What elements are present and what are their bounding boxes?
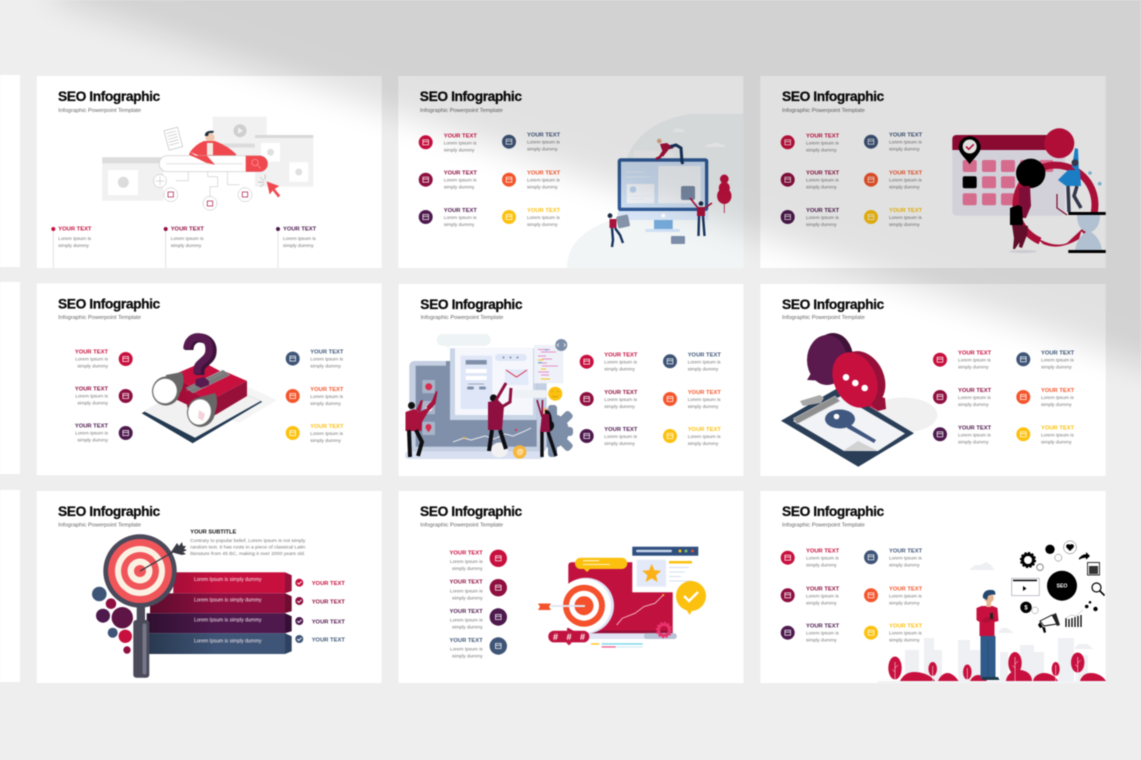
item 4: simply dummy: [310, 364, 342, 370]
item 3: YOUR TEXT: [450, 609, 483, 615]
illustration: SEO icon cloud: $: [1024, 606, 1028, 612]
item 2: YOUR TEXT: [806, 586, 840, 592]
diagonal window shadow overlay: [55, 0, 1141, 417]
item 5: simply dummy: [889, 185, 920, 191]
item 2: Lorem Ipsum is: [958, 395, 991, 401]
item 4: [286, 350, 344, 370]
partial slide: left edge row 2: [0, 282, 20, 474]
item 1: YOUR TEXT: [806, 549, 840, 555]
item 2: Lorem Ipsum is: [444, 178, 477, 184]
item 2: simply dummy: [77, 401, 109, 407]
item 2: Lorem Ipsum is: [806, 593, 839, 599]
item 5: simply dummy: [688, 404, 719, 410]
item 4: YOUR TEXT: [527, 133, 561, 139]
illustration: laptop, target, browser and check: # # #: [553, 632, 585, 642]
item 2: [580, 390, 638, 410]
illustration: binoculars and question mark: [142, 337, 277, 443]
item 5: Lorem Ipsum is: [889, 178, 922, 184]
item 3: simply dummy: [444, 222, 475, 228]
panel: slide 1 search bar: [37, 76, 382, 268]
item 3: [580, 427, 638, 447]
item 5: simply dummy: [889, 600, 920, 606]
item 2: [781, 171, 840, 191]
item 4: simply dummy: [889, 562, 920, 568]
item 4: Lorem Ipsum is: [527, 140, 560, 146]
item 3: YOUR TEXT: [444, 208, 477, 214]
item 1: YOUR TEXT: [450, 550, 483, 556]
item 3: YOUR TEXT: [958, 425, 992, 431]
item 2: YOUR TEXT: [444, 171, 477, 177]
item 1: simply dummy: [77, 364, 109, 370]
item 6: Lorem Ipsum is: [527, 215, 560, 221]
item 6: [502, 208, 561, 228]
item 1: simply dummy: [958, 365, 989, 371]
item 1: simply dummy: [806, 147, 837, 153]
item 4: YOUR TEXT: [310, 350, 344, 356]
ribbon bars: Lorem Ipsum is simply dummy: [194, 639, 262, 645]
item 2: Lorem Ipsum is: [806, 178, 839, 184]
item 4: Lorem Ipsum is: [1041, 357, 1074, 363]
item 1: YOUR TEXT: [75, 350, 108, 356]
item 3: simply dummy: [958, 439, 989, 445]
item 5: YOUR TEXT: [310, 387, 344, 393]
item 4: Lorem Ipsum is: [450, 647, 483, 653]
item 4: [502, 133, 561, 153]
item 1: [450, 550, 507, 572]
heading: SEO Infographic: [420, 504, 523, 519]
item 5: YOUR TEXT: [889, 586, 923, 592]
item 5: Lorem Ipsum is: [527, 178, 560, 184]
item 4: [663, 352, 721, 372]
subtitle block: Contrary to popular belief, Lorem Ipsum is not simply: [190, 538, 306, 544]
item 6: simply dummy: [1041, 439, 1072, 445]
item 1: YOUR TEXT: [604, 353, 638, 359]
subheading: Infographic Powerpoint Template: [782, 108, 865, 114]
item 6: Lorem Ipsum is: [688, 434, 721, 440]
item 6: Lorem Ipsum is: [889, 215, 922, 221]
item 4: Lorem Ipsum is: [889, 555, 922, 561]
item 6: YOUR TEXT: [310, 424, 344, 430]
item 3: Lorem Ipsum is: [444, 215, 477, 221]
item 2: simply dummy: [806, 185, 837, 191]
item: your text 3: simply dummy: [283, 243, 314, 249]
check list: YOUR TEXT: [312, 581, 345, 587]
item 4: YOUR TEXT: [889, 548, 923, 554]
illustration: laptop, gear and team: [405, 334, 574, 459]
item 6: [864, 624, 923, 644]
item 4: [864, 548, 923, 568]
item 6: YOUR TEXT: [1041, 425, 1075, 431]
item: your text 2: simply dummy: [171, 243, 202, 249]
partial slide: left edge row 1: [0, 75, 20, 267]
item 6: Lorem Ipsum is: [1041, 432, 1074, 438]
item: your text 1: Lorem Ipsum is: [58, 236, 92, 242]
item 5: simply dummy: [310, 401, 342, 407]
item 1: Lorem Ipsum is: [958, 358, 991, 364]
illustration: person with phone: [976, 590, 1000, 680]
item 2: YOUR TEXT: [604, 390, 638, 396]
item 4: simply dummy: [527, 147, 558, 153]
item 2: Lorem Ipsum is: [75, 394, 109, 400]
item 6: simply dummy: [527, 222, 558, 228]
item 1: Lorem Ipsum is: [806, 556, 839, 562]
panel: slide 2 monitor: [398, 76, 743, 268]
item 1: YOUR TEXT: [958, 351, 992, 357]
illustration: clipboard, key and speech bubbles: [781, 333, 937, 467]
item 6: simply dummy: [889, 222, 920, 228]
subheading: Infographic Powerpoint Template: [420, 522, 503, 528]
item 4: [864, 133, 923, 153]
item 6: [663, 427, 721, 447]
item 2: simply dummy: [444, 185, 475, 191]
item 6: Lorem Ipsum is: [310, 431, 344, 437]
item 3: simply dummy: [604, 441, 636, 447]
item 1: YOUR TEXT: [806, 133, 840, 139]
item: your text 2: [164, 226, 204, 268]
item 3: YOUR TEXT: [75, 424, 108, 430]
item 4: Lorem Ipsum is: [889, 140, 922, 146]
item 5: Lorem Ipsum is: [310, 394, 344, 400]
item: your text 1: YOUR TEXT: [58, 226, 92, 232]
item: your text 2: Lorem Ipsum is: [171, 236, 204, 242]
check list: YOUR TEXT: [312, 637, 345, 643]
item 6: [864, 208, 923, 228]
item 1: Lorem Ipsum is: [444, 140, 477, 146]
item 3: Lorem Ipsum is: [958, 432, 991, 438]
illustration: SEO icon cloud: [1012, 541, 1104, 633]
item 2: [419, 171, 477, 191]
subheading: Infographic Powerpoint Template: [782, 522, 865, 528]
heading: SEO Infographic: [420, 297, 523, 312]
subheading: Infographic Powerpoint Template: [58, 108, 141, 114]
item: your text 1: [51, 226, 92, 268]
item 1: Lorem Ipsum is: [604, 360, 638, 366]
item 4: YOUR TEXT: [450, 638, 483, 644]
item 5: YOUR TEXT: [1041, 388, 1075, 394]
subheading: Infographic Powerpoint Template: [58, 522, 141, 528]
subtitle block: random text. It has roots in a piece of classical Latin: [190, 544, 306, 550]
item 5: YOUR TEXT: [889, 171, 923, 177]
heading: SEO Infographic: [782, 89, 885, 104]
subtitle block: YOUR SUBTITLE: [190, 529, 236, 535]
item 4: YOUR TEXT: [889, 133, 923, 139]
item 1: simply dummy: [806, 563, 837, 569]
item 3: YOUR TEXT: [806, 208, 840, 214]
item 4: Lorem Ipsum is: [688, 359, 721, 365]
item 6: [1016, 425, 1075, 445]
heading: SEO Infographic: [58, 504, 161, 519]
item 1: [933, 351, 992, 371]
panel: slide 4 binoculars: [37, 283, 382, 475]
item 3: Lorem Ipsum is: [806, 215, 839, 221]
item 5: YOUR TEXT: [527, 171, 561, 177]
subtitle block: [190, 529, 306, 557]
item 2: [781, 586, 840, 606]
item 3: [933, 425, 992, 445]
panel: slide 8 laptop and target: [398, 491, 744, 683]
item 5: [1016, 388, 1075, 408]
item 3: simply dummy: [452, 625, 483, 631]
item 1: simply dummy: [604, 367, 636, 373]
item 4: Lorem Ipsum is: [310, 357, 344, 363]
check list: YOUR TEXT: [312, 619, 345, 625]
heading: SEO Infographic: [420, 89, 522, 104]
item 5: Lorem Ipsum is: [1041, 395, 1074, 401]
item 2: Lorem Ipsum is: [604, 397, 638, 403]
subheading: Infographic Powerpoint Template: [420, 108, 503, 114]
item: your text 1: simply dummy: [58, 243, 90, 249]
item 3: Lorem Ipsum is: [450, 618, 483, 624]
panel: slide 7 target and ribbons: [37, 491, 382, 683]
illustration: city skyline and trees: [878, 562, 1106, 684]
partial slide: left edge row 3: [0, 490, 20, 682]
illustration: SEO icon cloud: SEO: [1057, 584, 1067, 590]
item 5: [502, 171, 561, 191]
item 2: Lorem Ipsum is: [450, 588, 483, 594]
item 4: simply dummy: [688, 366, 719, 372]
ribbon bars: Lorem Ipsum is simply dummy: [194, 577, 262, 583]
item 6: YOUR TEXT: [889, 624, 923, 630]
panel: slide 6 speech bubbles and clipboard: [760, 284, 1106, 476]
item 2: simply dummy: [958, 402, 989, 408]
illustration: calendar, clock and people: [952, 128, 1106, 253]
item 4: simply dummy: [452, 654, 483, 660]
item 3: [781, 208, 840, 228]
subtitle block: literature from 45 BC, making it over 2000 years old.: [190, 551, 305, 557]
item 3: Lorem Ipsum is: [75, 431, 109, 437]
item 1: [781, 133, 840, 153]
item 2: YOUR TEXT: [75, 386, 108, 392]
item 1: simply dummy: [444, 147, 475, 153]
item 1: Lorem Ipsum is: [450, 559, 483, 565]
item 3: [419, 208, 477, 228]
item 3: YOUR TEXT: [806, 624, 840, 630]
illustration: monitor with people: [567, 114, 743, 268]
heading: SEO Infographic: [782, 297, 885, 312]
item 1: Lorem Ipsum is: [806, 140, 839, 146]
item 6: YOUR TEXT: [527, 208, 561, 214]
item 6: YOUR TEXT: [688, 427, 721, 433]
illustration: laptop, gear and team: @: [517, 449, 524, 456]
item 6: [286, 424, 344, 444]
item 5: simply dummy: [1041, 402, 1072, 408]
item 3: YOUR TEXT: [604, 427, 638, 433]
item 2: YOUR TEXT: [450, 580, 483, 586]
item 2: simply dummy: [452, 595, 483, 601]
item 1: [781, 549, 840, 569]
item 2: [75, 386, 133, 407]
item 5: simply dummy: [527, 185, 558, 191]
illustration: laptop, target, browser and check: [538, 547, 706, 648]
item 6: YOUR TEXT: [889, 208, 923, 214]
heading: SEO Infographic: [58, 89, 161, 104]
item 5: [864, 586, 923, 606]
item 2: [450, 579, 507, 601]
item 6: Lorem Ipsum is: [889, 631, 922, 637]
item 3: Lorem Ipsum is: [806, 631, 839, 637]
item 4: simply dummy: [1041, 364, 1072, 370]
ribbon bars: Lorem Ipsum is simply dummy: [194, 598, 262, 604]
heading: SEO Infographic: [58, 296, 161, 312]
panel: slide 9 person and city: [760, 491, 1106, 684]
item 6: simply dummy: [889, 638, 920, 644]
item 5: [663, 390, 721, 410]
item 3: simply dummy: [77, 438, 109, 444]
subheading: Infographic Powerpoint Template: [782, 315, 865, 321]
item 4: YOUR TEXT: [688, 352, 721, 358]
item 4: simply dummy: [889, 147, 920, 153]
item 5: [864, 171, 923, 191]
item: your text 3: [276, 226, 317, 268]
item 3: [450, 608, 507, 631]
panel: slide 3 calendar: [760, 76, 1106, 268]
ribbon bars: Lorem Ipsum is simply dummy: [194, 617, 262, 623]
item: your text 3: Lorem Ipsum is: [283, 236, 316, 242]
item 1: YOUR TEXT: [444, 133, 477, 139]
panel: slide 5 laptop team: [398, 284, 744, 476]
item 3: Lorem Ipsum is: [604, 434, 638, 440]
item 5: Lorem Ipsum is: [889, 593, 922, 599]
check list: [295, 579, 345, 643]
ribbon bars: [147, 572, 292, 654]
item 2: [933, 388, 992, 408]
subheading: Infographic Powerpoint Template: [421, 315, 503, 321]
item: your text 3: YOUR TEXT: [283, 226, 317, 232]
item 1: [419, 133, 477, 153]
item 1: Lorem Ipsum is: [75, 357, 109, 363]
item 2: YOUR TEXT: [806, 171, 840, 177]
item 4: YOUR TEXT: [1041, 350, 1075, 356]
item: your text 2: YOUR TEXT: [171, 226, 204, 232]
item 3: [75, 424, 133, 444]
item 3: [781, 624, 840, 644]
item 3: simply dummy: [806, 638, 837, 644]
item 2: YOUR TEXT: [958, 388, 992, 394]
item 2: simply dummy: [806, 600, 837, 606]
item 2: simply dummy: [604, 404, 636, 410]
item 5: YOUR TEXT: [688, 390, 721, 396]
item 1: [75, 350, 133, 370]
check list: YOUR TEXT: [312, 599, 345, 605]
item 1: simply dummy: [452, 566, 483, 572]
item 1: [580, 353, 638, 373]
item 6: simply dummy: [310, 438, 342, 444]
item 5: Lorem Ipsum is: [688, 397, 721, 403]
item 4: [1016, 350, 1075, 370]
item 4: [450, 637, 507, 660]
illustration: search bar with person: [102, 117, 313, 210]
item 3: simply dummy: [806, 222, 837, 228]
item 5: [286, 387, 344, 407]
item 6: simply dummy: [688, 441, 719, 447]
illustration: magnifier target and dots: [92, 534, 187, 678]
heading: SEO Infographic: [782, 504, 885, 519]
subheading: Infographic Powerpoint Template: [58, 315, 141, 321]
